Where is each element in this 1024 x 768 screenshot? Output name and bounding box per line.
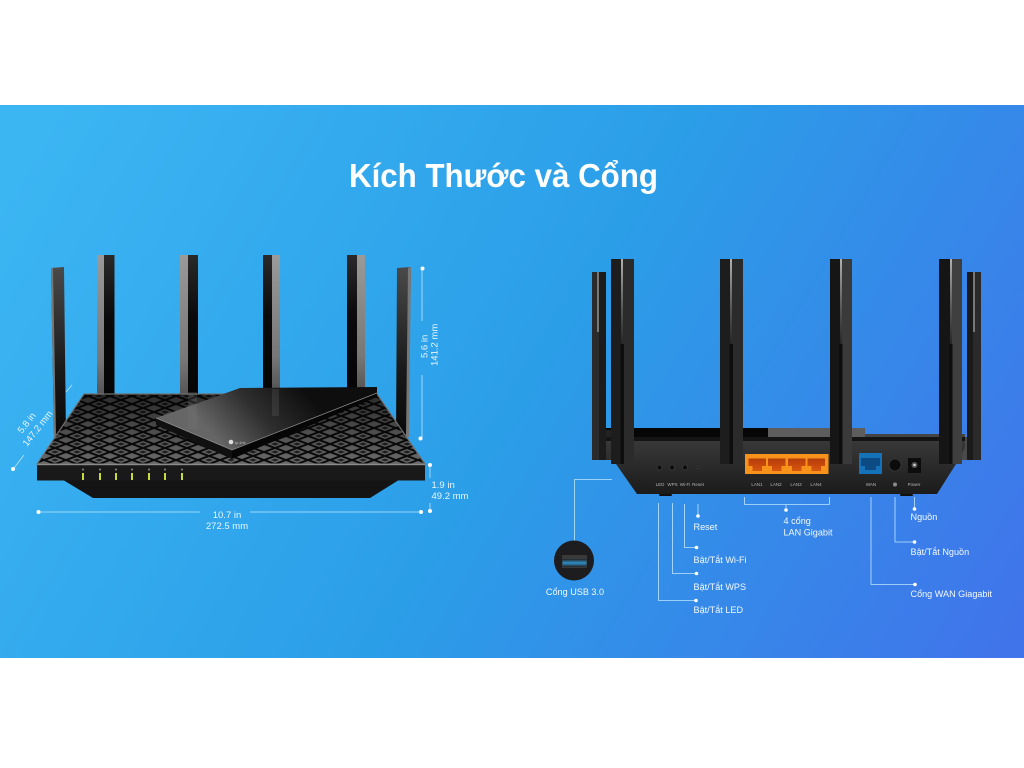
rear control labels: WPS (667, 482, 678, 487)
dimension: width 10.7 in: 10.7 in (213, 510, 241, 521)
callout: WPS toggle: Bật/Tắt WPS (694, 582, 746, 592)
antenna: front third (180, 255, 198, 395)
dimension: height 1.9 in (428, 463, 469, 513)
dimension: height 1.9 in: 1.9 in (432, 480, 455, 491)
rear control labels: LAN4 (810, 482, 822, 487)
rear control labels: LAN2 (770, 482, 782, 487)
blue WAN port (859, 453, 882, 474)
dimension: antenna 5.6 in: 5.6 in (420, 335, 430, 358)
rear antenna 2 (720, 259, 743, 464)
rear antenna 3 (830, 259, 852, 464)
rear control labels: Reset (692, 482, 705, 487)
callout: Wi-Fi toggle: Bật/Tắt Wi-Fi (694, 555, 747, 565)
antenna: front far right (396, 267, 411, 437)
rear router (592, 259, 981, 496)
dimension: width 10.7 in (36, 510, 423, 532)
LED indicators (82, 468, 183, 480)
title: Kích Thước và Cổng (349, 157, 658, 194)
rear antennas far sides (592, 272, 981, 460)
dimension: width 10.7 in: 272.5 mm (206, 521, 248, 532)
callout: Reset (694, 504, 718, 532)
rear control labels: LAN3 (790, 482, 802, 487)
rear control labels: LED (656, 482, 665, 487)
dimension: depth 5.8 in: 147.2 mm (21, 409, 55, 449)
callout: power input: Nguồn (910, 512, 937, 522)
front router with antennas (37, 255, 425, 498)
dimension: height 1.9 in: 49.2 mm (432, 491, 469, 502)
front panel (37, 464, 425, 480)
dimension: antenna 5.6 in: 141.2 mm (430, 324, 440, 366)
power jack (908, 458, 921, 473)
router top deck with woven pattern (37, 394, 425, 464)
underside stand (64, 480, 398, 498)
callout: power toggle (895, 497, 969, 557)
callout: Reset: Reset (694, 522, 718, 532)
antenna: front fourth (263, 255, 280, 390)
rear control labels: Power (908, 482, 921, 487)
rear body panel (597, 438, 965, 494)
dimension: depth 5.8 in: 5.8 in (16, 411, 39, 436)
rear control labels: WAN (866, 482, 876, 487)
glossy cover plate (156, 387, 377, 459)
power button (889, 459, 901, 486)
callout: 4 LAN ports: 4 cổng (784, 516, 811, 526)
rear antenna 4 (939, 259, 962, 464)
rear control labels: LAN1 (751, 482, 763, 487)
callout: 4 LAN ports: LAN Gigabit (784, 528, 833, 538)
button holes (657, 465, 699, 470)
rear antenna 1 (611, 259, 634, 464)
rear control labels: Wi-Fi (680, 482, 690, 487)
orange LAN ports (745, 454, 828, 474)
blue background band (0, 105, 1024, 658)
callout: Wi-Fi toggle (684, 504, 747, 565)
callout: WAN port: Cổng WAN Giagabit (910, 589, 993, 599)
callout: LED toggle (658, 503, 743, 615)
antenna: front fifth (347, 255, 365, 390)
callout: 4 LAN ports (744, 497, 833, 538)
callout: WAN port (871, 497, 993, 599)
rear top edge (595, 428, 978, 460)
callout: power toggle: Bật/Tắt Nguồn (910, 547, 969, 557)
callout: power input (910, 497, 937, 522)
dimension: antenna 5.6 in (418, 266, 440, 440)
callout: USB 3.0 (546, 480, 612, 597)
callout: USB 3.0: Cổng USB 3.0 (546, 587, 604, 597)
rear control labels (656, 482, 921, 487)
antenna: front second (97, 255, 114, 395)
dimension: depth 5.8 in (11, 385, 72, 471)
callout: WPS toggle (672, 503, 746, 592)
glossy cover plate: tp-link (235, 440, 246, 445)
callout: LED toggle: Bật/Tắt LED (694, 605, 743, 615)
rubber feet (659, 494, 913, 496)
antenna: front far left (51, 267, 66, 437)
